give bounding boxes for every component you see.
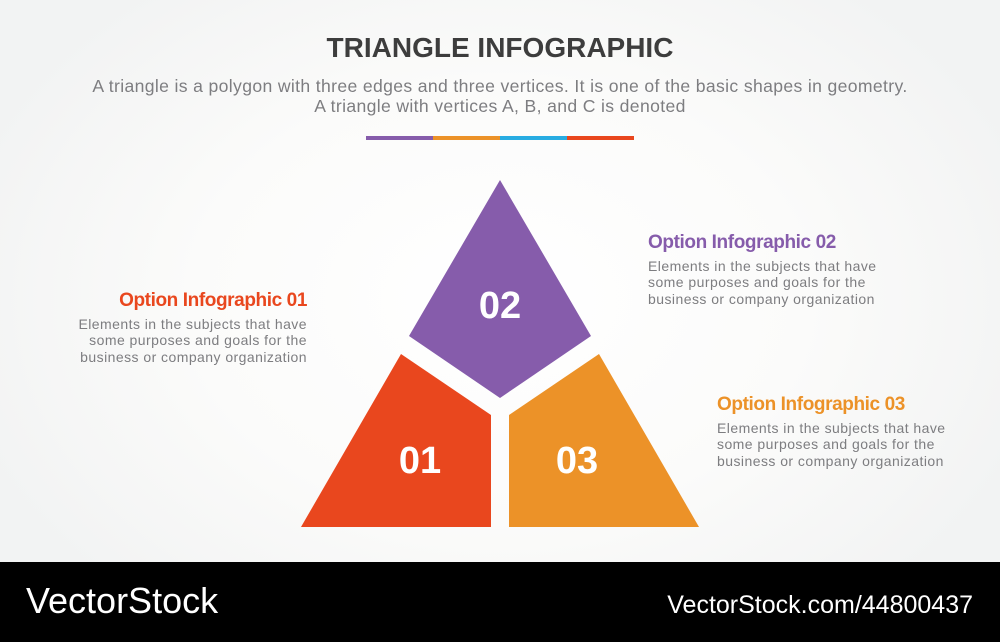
segment 01: 01 [399,440,441,482]
subtitle text block [92,76,908,116]
footer logo text: VectorStock [26,580,218,621]
option 02 body [648,258,877,307]
colour divider [366,136,634,140]
option 01 text [78,290,307,365]
option 01 body: some purposes and goals for the [89,332,307,348]
subtitle text block: A triangle with vertices A, B, and C is denoted [314,96,686,116]
option 02 body: business or company organization [648,291,875,307]
option 02 text [648,232,877,307]
option 03 body [717,420,946,469]
option 01 body [78,316,307,365]
option 03 body: some purposes and goals for the [717,436,935,452]
option 02 heading: Option Infographic 02 [648,232,836,253]
footer url text: VectorStock.com/44800437 [667,591,973,619]
option 01 body: Elements in the subjects that have [78,316,307,332]
segment 03 [509,354,699,527]
option 03 heading: Option Infographic 03 [717,394,905,415]
segment 02 [409,180,591,398]
segment 02: 02 [479,285,521,327]
option 03 text [717,394,946,469]
option 03 body: Elements in the subjects that have [717,420,946,436]
segment 03: 03 [556,440,598,482]
option 02 body: Elements in the subjects that have [648,258,877,274]
title: TRIANGLE INFOGRAPHIC [327,32,673,63]
segment 01 [301,354,491,527]
option 03 body: business or company organization [717,453,944,469]
option 02 body: some purposes and goals for the [648,274,866,290]
footer bar [0,562,1000,642]
option 01 body: business or company organization [80,349,307,365]
subtitle text block: A triangle is a polygon with three edges and three vertices. It is one of the basic shapes in geometry. [92,76,908,96]
option 01 heading: Option Infographic 01 [119,290,307,311]
